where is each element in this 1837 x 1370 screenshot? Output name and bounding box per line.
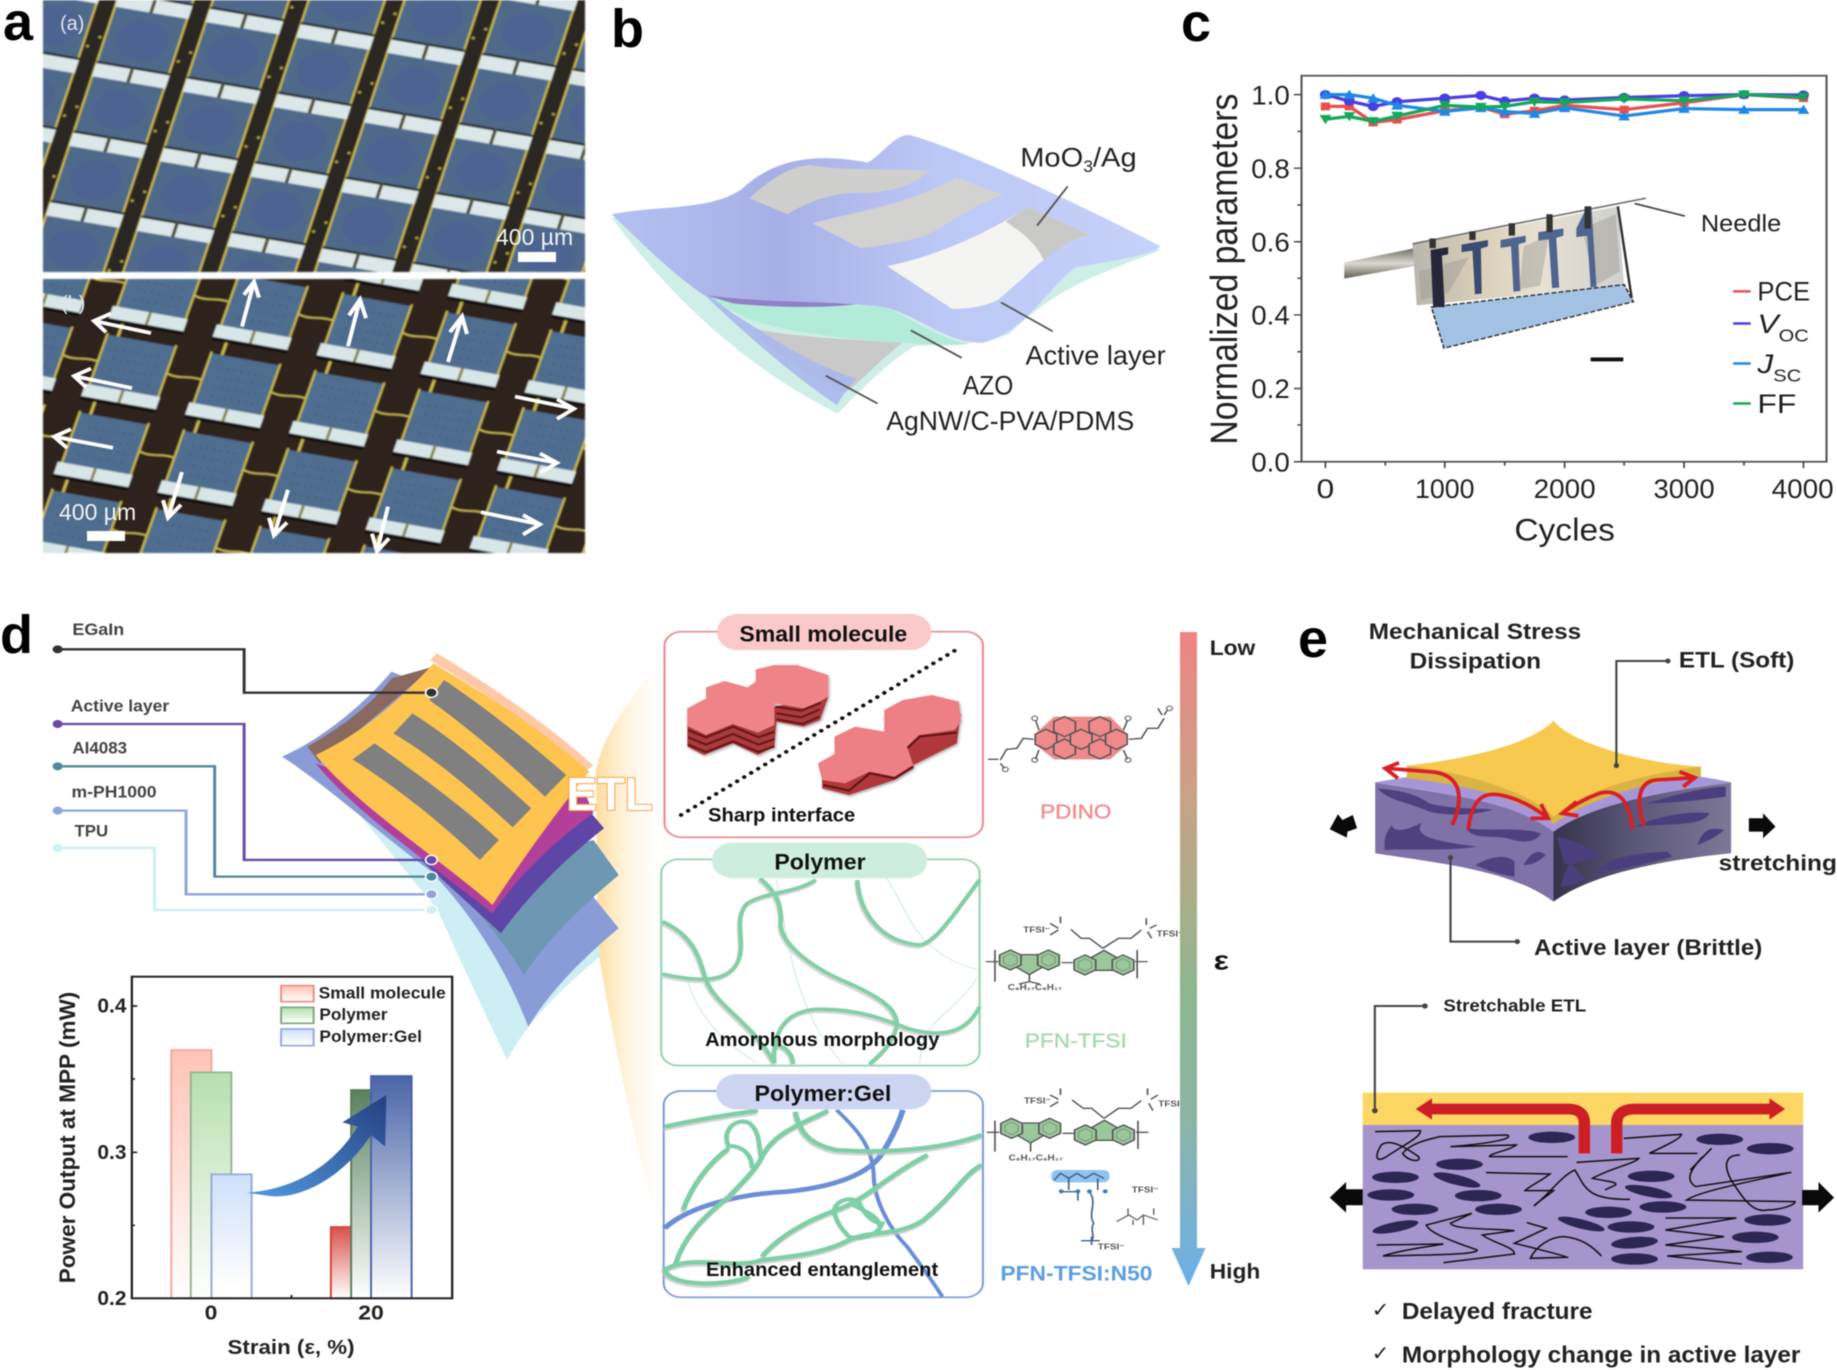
red stress arrows xyxy=(1385,763,1695,829)
electrodes xyxy=(1431,206,1596,307)
label active layer: Active layer xyxy=(71,698,170,716)
y tick labels xyxy=(1251,80,1290,478)
label High: High xyxy=(1210,1260,1260,1284)
legend keys xyxy=(1733,288,1751,295)
top face xyxy=(687,665,828,735)
legend polymer: Polymer xyxy=(319,1005,388,1024)
y tick labels: 0.2 xyxy=(97,1286,126,1310)
pill polymer xyxy=(712,843,927,878)
axis ticks xyxy=(1294,95,1803,468)
yellow focus cone from ETL xyxy=(596,650,668,1250)
x tick labels: 0 xyxy=(1317,474,1334,504)
electrode 2 xyxy=(812,177,1004,248)
green strands xyxy=(665,1111,982,1283)
dot end xyxy=(426,855,437,865)
improvement arrow xyxy=(247,1095,386,1196)
label Active layer: Active layer xyxy=(1026,340,1166,370)
arrow left xyxy=(1330,814,1357,838)
single PDI layers xyxy=(818,695,961,795)
line m-PH1000 xyxy=(58,811,431,894)
y axis title: Power Output at MPP (mW) xyxy=(56,992,81,1283)
heading polymer: Polymer xyxy=(774,851,866,875)
series FF xyxy=(1325,95,1803,121)
ETL tag: ETL xyxy=(567,770,653,821)
blue lower left strip xyxy=(696,286,856,405)
label stretchable ETL: Stretchable ETL xyxy=(1443,996,1586,1016)
key Voc xyxy=(1733,320,1751,327)
label stretching: stretching xyxy=(1719,850,1837,875)
panel b: device layer stack xyxy=(611,0,1166,436)
caption amorphous: Amorphous morphology xyxy=(705,1028,939,1050)
stacked PDI layers xyxy=(687,665,828,755)
name PDINO: PDINO xyxy=(1040,800,1111,823)
box small molecule xyxy=(665,632,983,837)
lower: cross-section schematic xyxy=(1330,996,1834,1367)
needle label: Needle xyxy=(1701,209,1781,237)
leader dots active xyxy=(1450,858,1517,942)
ETL top face xyxy=(1407,721,1701,817)
dot end xyxy=(426,688,437,697)
top contacts xyxy=(1433,206,1588,248)
layer top face xyxy=(818,695,961,783)
bar small molecule 20 xyxy=(331,1227,352,1298)
y tick labels xyxy=(97,994,127,1310)
blotches left xyxy=(1378,788,1546,877)
y axis title: Normalized parameters xyxy=(1204,94,1246,445)
callout TPU xyxy=(53,823,437,915)
brown underlayer xyxy=(307,667,434,763)
legend Jsc: J xyxy=(1756,349,1775,379)
TFSI label: TFSI⁻ xyxy=(1132,1186,1159,1194)
tag (a): (a) xyxy=(60,13,84,35)
needle tip xyxy=(1413,198,1646,244)
side edge xyxy=(1618,206,1632,298)
red head right xyxy=(1769,1098,1785,1120)
x tick labels xyxy=(205,1302,384,1324)
blue gel strands xyxy=(665,1110,942,1297)
label AgNW/C-PVA/PDMS: AgNW/C-PVA/PDMS xyxy=(886,406,1134,436)
ETL strip xyxy=(1363,1093,1803,1125)
check 2: ✓ xyxy=(1372,1342,1389,1365)
heading small molecule: Small molecule xyxy=(739,623,907,647)
thin polymer strands xyxy=(687,878,978,1066)
line EGaIn xyxy=(58,649,431,693)
fluorene unit 2 xyxy=(1075,1120,1134,1145)
point delayed fracture: Delayed fracture xyxy=(1402,1299,1593,1324)
panels: small molecule and polymer xyxy=(661,614,1256,1066)
x tick labels: 2000 xyxy=(1534,474,1596,504)
legend Voc: OC xyxy=(1779,326,1809,345)
label MoO3/Ag: MoO xyxy=(1020,142,1083,172)
side chains xyxy=(988,708,1167,768)
y tick labels: 1.0 xyxy=(1251,80,1290,111)
dot end xyxy=(426,890,437,899)
stripes xyxy=(688,703,821,752)
electrode 3 xyxy=(887,207,1090,309)
label AZO: AZO xyxy=(963,370,1013,400)
micrograph (b): stretched island array xyxy=(43,279,585,553)
x tick labels: 20 xyxy=(358,1302,384,1324)
line AI4083 xyxy=(58,766,431,877)
active layer xyxy=(1363,1125,1803,1269)
rings xyxy=(1035,717,1127,759)
inset photo: device on needle xyxy=(1344,198,1646,348)
panel e: stress dissipation xyxy=(1298,609,1837,1367)
y tick labels: 0.2 xyxy=(1251,374,1290,405)
counter ion right: TFSI⁻ xyxy=(1157,930,1184,938)
y tick labels: 0.4 xyxy=(97,994,127,1017)
AI4083 layer xyxy=(442,840,619,975)
line active layer xyxy=(58,724,431,860)
entanglement knot upper xyxy=(727,1122,762,1168)
x axis title: Cycles xyxy=(1514,513,1615,548)
panel d: ETL materials xyxy=(0,605,1260,1359)
key Jsc xyxy=(1733,360,1751,367)
scale bar top xyxy=(518,252,556,262)
dot start xyxy=(53,762,63,770)
bar small molecule 0 xyxy=(171,1050,211,1298)
ETL layer xyxy=(316,663,589,905)
blue top sheet xyxy=(611,135,1161,343)
leader ETL xyxy=(1616,661,1668,766)
structure PFN-TFSI:N50 xyxy=(987,1088,1185,1251)
swatch polymer gel xyxy=(281,1029,314,1046)
bonds and chains xyxy=(986,917,1157,984)
series Voc xyxy=(1325,95,1803,106)
TPU layer xyxy=(320,767,600,1060)
legend polymer gel: Polymer:Gel xyxy=(319,1027,422,1046)
label active layer brittle: Active layer (Brittle) xyxy=(1534,935,1762,960)
series PCE xyxy=(1325,95,1803,122)
m-PH1000 layer xyxy=(282,672,619,1027)
scale label bottom: 400 µm xyxy=(59,499,136,525)
structure PDINO xyxy=(988,706,1172,772)
series Jsc xyxy=(1325,95,1803,116)
label m-PH1000: m-PH1000 xyxy=(72,783,157,802)
ETL layer halo xyxy=(434,657,589,768)
polymer chains xyxy=(1375,1131,1795,1264)
leader dots ETL xyxy=(1616,661,1668,766)
dot start xyxy=(53,720,63,728)
strain gradient arrow xyxy=(1172,632,1206,1286)
x tick labels: 3000 xyxy=(1653,474,1715,504)
fluorene unit 2 xyxy=(1074,950,1134,975)
N50 counter ion: TFSI⁻ xyxy=(1098,1242,1125,1251)
needle leader xyxy=(1635,204,1685,216)
name PFN-TFSI: PFN-TFSI xyxy=(1025,1029,1127,1052)
y tick labels: 0.8 xyxy=(1251,154,1290,184)
box polymer xyxy=(661,859,980,1066)
red arrow left xyxy=(1431,1109,1584,1153)
name PFN-TFSI:N50: PFN-TFSI:N50 xyxy=(1000,1262,1152,1286)
panel: polymer gel xyxy=(664,1074,1260,1297)
EGaIn electrodes xyxy=(353,680,566,860)
line chart xyxy=(1204,76,1834,548)
blotches right xyxy=(1557,787,1726,887)
legend xyxy=(1733,277,1810,419)
key FF xyxy=(1733,400,1751,407)
bar polymer 20 xyxy=(351,1090,373,1298)
red arrow right xyxy=(1617,1109,1770,1153)
magenta edge xyxy=(316,763,593,913)
black arrow left xyxy=(1330,1182,1363,1213)
green strands shadow xyxy=(664,1113,981,1286)
panel label b: b xyxy=(611,0,644,59)
bar chart: power output at MPP xyxy=(56,977,452,1359)
callout m-PH1000 xyxy=(53,783,437,899)
bonds and chains xyxy=(987,1088,1158,1152)
acceptor domains xyxy=(1367,1132,1794,1265)
leader active layer xyxy=(1450,858,1517,942)
label epsilon: ε xyxy=(1214,946,1229,975)
micrograph (a): unstretched island array xyxy=(43,0,585,272)
check 1: ✓ xyxy=(1372,1298,1389,1321)
block left face xyxy=(1375,782,1554,902)
point morphology change: Morphology change in active layer xyxy=(1402,1342,1800,1367)
plot frame xyxy=(1302,76,1827,462)
label MoO3/Ag: /Ag xyxy=(1093,142,1137,172)
leader lines xyxy=(826,186,1068,404)
panel a: micrographs xyxy=(3,0,585,553)
legend FF: FF xyxy=(1757,389,1796,419)
structure PFN-TFSI xyxy=(986,917,1184,992)
black arrow right xyxy=(1802,1182,1834,1213)
device stack with callouts xyxy=(53,621,653,1060)
fluorene unit 1 xyxy=(1000,950,1059,975)
panel label d: d xyxy=(0,605,33,665)
counter ion right: TFSI⁻ xyxy=(1158,1100,1185,1108)
title line 2: Dissipation xyxy=(1410,648,1541,673)
swatch small molecule xyxy=(281,986,314,1002)
layer stripes xyxy=(823,713,959,791)
callout active layer xyxy=(53,698,437,865)
N50 oxygen atoms xyxy=(1059,1189,1108,1193)
dotted sharp interface xyxy=(681,649,957,815)
line TPU xyxy=(58,848,431,910)
alkyl chains: C₈H₁₇C₈H₁₇ xyxy=(1009,1154,1063,1162)
caption sharp interface: Sharp interface xyxy=(708,804,855,826)
callout EGaIn xyxy=(53,621,437,697)
active layer xyxy=(421,813,604,933)
entanglement knot lower xyxy=(834,1199,882,1238)
side chains: C₈H₁₇C₈H₁₇ xyxy=(1008,983,1062,992)
upper: 3D block schematic xyxy=(1330,619,1837,960)
arrow right xyxy=(1749,813,1776,838)
TFSI anion xyxy=(1116,1208,1158,1225)
title line 1: Mechanical Stress xyxy=(1369,619,1581,644)
ticks xyxy=(132,1006,291,1298)
tag (b): (b) xyxy=(61,293,85,315)
core fill xyxy=(1036,717,1127,759)
dot start xyxy=(53,645,63,653)
stack sides xyxy=(687,697,828,755)
x tick labels: 1000 xyxy=(1415,474,1475,504)
white stretching arrows xyxy=(54,282,574,551)
legend Voc: V xyxy=(1757,309,1782,339)
chart frame xyxy=(132,977,452,1298)
dot start xyxy=(53,807,63,815)
y tick labels: 0.0 xyxy=(1251,448,1290,478)
legend Jsc: SC xyxy=(1773,366,1801,385)
needle shaft xyxy=(1344,248,1415,279)
x tick labels: 0 xyxy=(205,1302,217,1324)
scale bar xyxy=(1591,357,1623,361)
legend PCE: PCE xyxy=(1757,277,1810,307)
electrode 3 grey shade xyxy=(1006,207,1090,261)
bar polymer gel 0 xyxy=(211,1174,252,1298)
x tick labels xyxy=(1317,474,1834,504)
legend small molecule: Small molecule xyxy=(319,983,446,1002)
y tick labels: 0.4 xyxy=(1251,301,1290,331)
layer sides xyxy=(822,713,961,795)
counter ion left: TFSI⁻ xyxy=(1024,1096,1051,1105)
label EGaIn: EGaIn xyxy=(72,621,124,639)
panel c: cycling stability chart xyxy=(1181,0,1834,548)
scale label top: 400 µm xyxy=(496,224,573,250)
label ETL soft: ETL (Soft) xyxy=(1679,647,1794,672)
red head left xyxy=(1416,1098,1432,1120)
mint back edge xyxy=(611,186,1161,414)
legend xyxy=(281,983,446,1046)
thick polymer strands xyxy=(662,878,980,1064)
scale bar bottom xyxy=(87,531,125,541)
dot end xyxy=(426,872,437,881)
leader dots xyxy=(1375,1006,1425,1111)
dot end xyxy=(426,905,437,915)
pill small molecule xyxy=(717,614,931,650)
foil creases xyxy=(1419,214,1620,300)
fluorene unit 1 xyxy=(1001,1118,1060,1143)
bar polymer 0 xyxy=(191,1072,231,1298)
ETL side edge xyxy=(1407,766,1701,824)
label TPU: TPU xyxy=(74,823,108,841)
leader stretchable ETL xyxy=(1375,1006,1425,1111)
x axis title: Strain (ε, %) xyxy=(228,1335,355,1359)
label Low: Low xyxy=(1210,636,1256,660)
purple active layer edge xyxy=(703,295,860,307)
foil xyxy=(1413,206,1624,305)
electrode 1 xyxy=(749,165,929,214)
dot start xyxy=(53,844,63,852)
N50 highlight xyxy=(1051,1170,1109,1182)
grey bottom electrode xyxy=(745,327,902,393)
block top face xyxy=(1375,760,1731,832)
y tick labels: 0.3 xyxy=(97,1140,126,1164)
N50 backbone xyxy=(1054,1173,1104,1245)
counter ion left: TFSI⁻ xyxy=(1023,926,1050,934)
y tick labels: 0.6 xyxy=(1251,228,1290,258)
block right face xyxy=(1554,782,1731,902)
label MoO3/Ag: 3 xyxy=(1083,158,1093,176)
pill polymer gel xyxy=(716,1074,931,1109)
thick polymer strands shadow xyxy=(661,881,978,1066)
panel label e: e xyxy=(1298,609,1328,669)
bar polymer gel 20 xyxy=(371,1076,412,1298)
mint AZO layer xyxy=(703,295,969,345)
oxygen atoms xyxy=(1002,706,1172,772)
label AI4083: AI4083 xyxy=(72,739,127,758)
callout AI4083 xyxy=(53,739,437,881)
blue substrate xyxy=(1431,285,1633,348)
box polymer gel xyxy=(664,1091,983,1297)
swatch polymer xyxy=(281,1007,314,1023)
caption enhanced entanglement: Enhanced entanglement xyxy=(706,1258,938,1280)
heading polymer gel: Polymer:Gel xyxy=(754,1082,891,1106)
curved device sheet xyxy=(611,135,1166,436)
